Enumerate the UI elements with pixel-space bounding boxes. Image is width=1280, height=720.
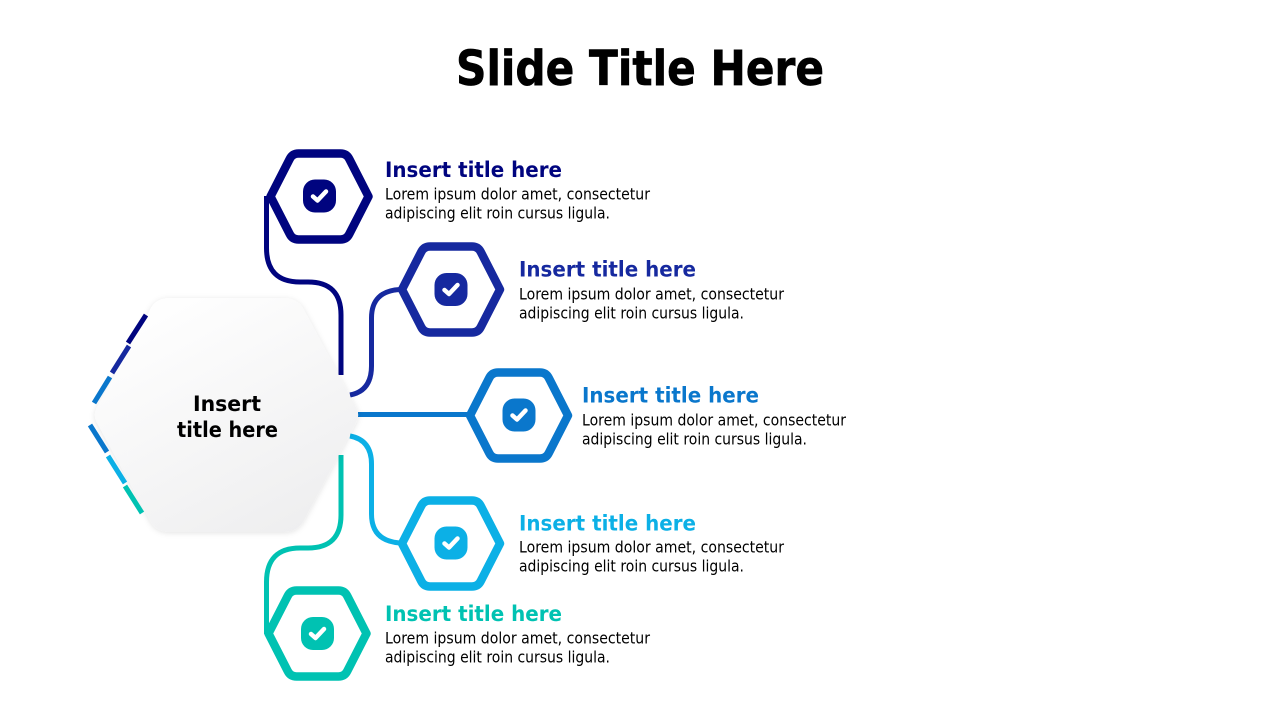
- icon: hexagon check navy: [270, 154, 368, 240]
- connector: teal: [266, 455, 341, 634]
- text: item 3: adipiscing elit roin cursus ligula.: [582, 430, 807, 448]
- text: item 5: Lorem ipsum dolor amet, consectetur: [385, 628, 650, 648]
- text: item 5: [385, 602, 650, 666]
- central label: Insert: [193, 392, 261, 417]
- text: item 2: Insert title here: [519, 258, 696, 282]
- item 5: [268, 590, 650, 676]
- text: item 4: Lorem ipsum dolor amet, consectetur: [519, 538, 784, 556]
- text: item 5: adipiscing elit roin cursus ligula.: [385, 648, 610, 666]
- connector: blue: [358, 412, 470, 417]
- text: item 3: Insert title here: [582, 384, 759, 408]
- item 4: [402, 500, 784, 586]
- icon: hexagon check royal blue: [402, 246, 500, 332]
- central label: title here: [177, 418, 278, 443]
- side dashes: [90, 315, 146, 513]
- text: item 5: Insert title here: [385, 602, 562, 627]
- text: item 3: Lorem ipsum dolor amet, consectetur: [582, 410, 846, 430]
- text: item 2: [519, 258, 784, 322]
- item 3: [470, 372, 846, 458]
- icon: hexagon check blue: [470, 372, 568, 458]
- text: item 4: adipiscing elit roin cursus ligula.: [519, 556, 744, 576]
- connector: royal blue: [350, 290, 400, 395]
- text: item 4: [519, 512, 784, 576]
- text: item 4: Insert title here: [519, 512, 696, 536]
- central hexagon: [95, 298, 358, 532]
- text: item 1: adipiscing elit roin cursus ligula.: [385, 204, 610, 222]
- item 1: [270, 154, 650, 240]
- text: item 1: [385, 158, 650, 222]
- item 2: [402, 246, 784, 332]
- connector: navy: [266, 196, 341, 375]
- text: item 1: Insert title here: [385, 158, 562, 183]
- text: item 3: [582, 384, 846, 448]
- text: item 2: Lorem ipsum dolor amet, consectetur: [519, 284, 784, 304]
- icon: hexagon check teal: [268, 590, 366, 676]
- title: Slide Title Here: [456, 41, 824, 97]
- text: item 1: Lorem ipsum dolor amet, consectetur: [385, 184, 650, 204]
- icon: hexagon check sky blue: [402, 500, 500, 586]
- connector: sky blue: [350, 436, 400, 543]
- text: item 2: adipiscing elit roin cursus ligula.: [519, 304, 744, 322]
